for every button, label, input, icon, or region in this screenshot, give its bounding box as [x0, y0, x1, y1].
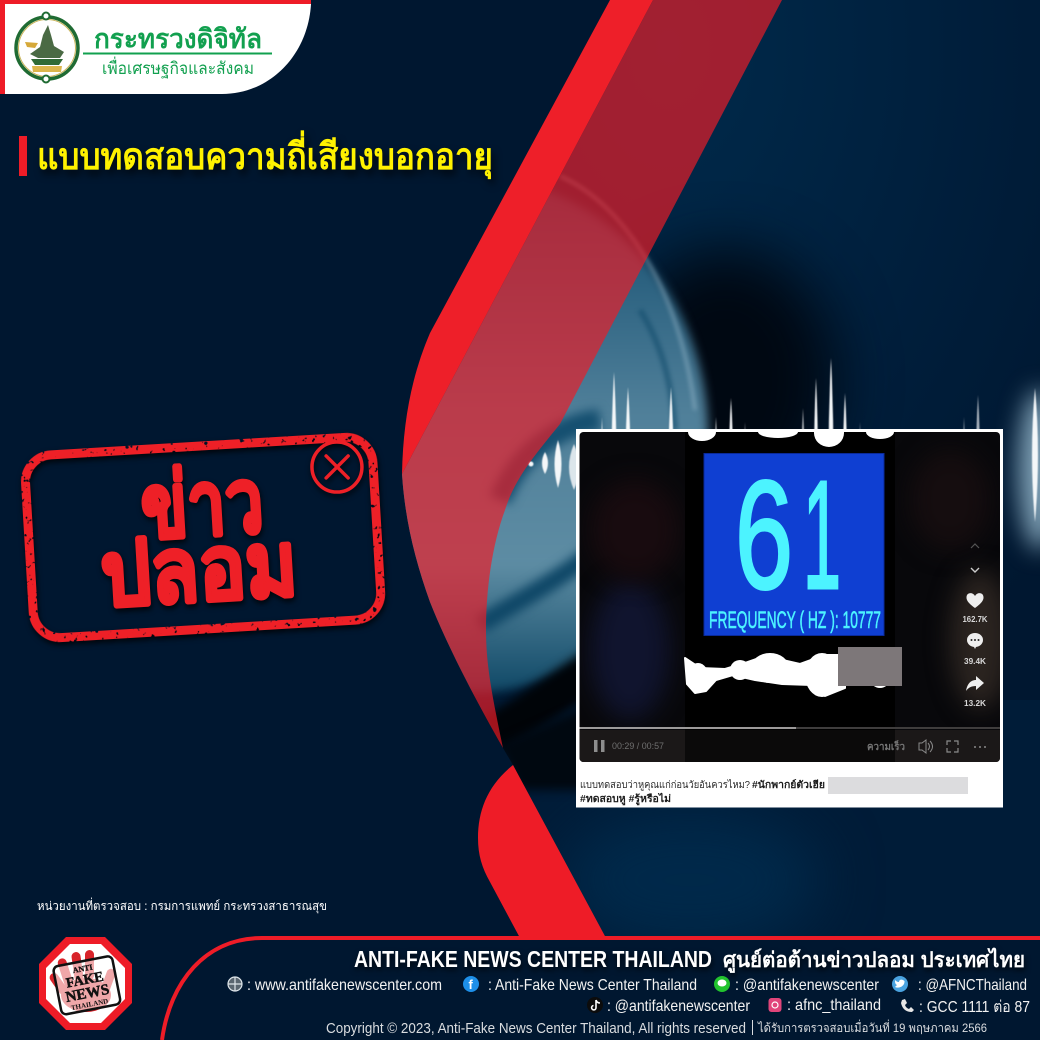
video caption: #นักพากย์ตัวเฮีย — [752, 779, 825, 791]
copyright line: Copyright © 2023, Anti-Fake News Center Thailand, All rights reserved — [326, 1020, 746, 1037]
bright red ribbon edge — [402, 0, 653, 474]
stamp: anti fake news — [53, 956, 121, 1015]
footer panel — [0, 936, 1040, 1040]
side actions: 39.4K — [964, 657, 986, 666]
white waveform blobs top — [688, 432, 894, 447]
stamp: anti fake news: ANTI — [72, 962, 93, 975]
video caption: #ทดสอบหู #รู้หรือไม่ — [580, 792, 671, 806]
contact row 1: : Anti-Fake News Center Thailand — [488, 977, 697, 994]
anti-fake news logo — [39, 937, 132, 1030]
video player — [580, 419, 1010, 762]
ministry logo panel — [0, 0, 311, 94]
lower red ribbon — [478, 765, 606, 938]
video controls bar: ความเร็ว — [867, 739, 905, 753]
contact row 1: : www.antifakenewscenter.com — [247, 977, 442, 994]
contact row 1: : @antifakenewscenter — [735, 977, 880, 994]
side actions: 162.7K — [962, 615, 988, 624]
frequency readout: FREQUENCY ( HZ ): 10777 — [709, 607, 881, 634]
copyright line: ได้รับการตรวจสอบเมื่อวันที่ 19 พฤษภาคม 2566 — [757, 1019, 987, 1035]
stamp: anti fake news: THAILAND — [70, 997, 109, 1012]
footer heading — [354, 946, 1025, 974]
blue frequency panel — [704, 449, 884, 636]
footer heading: ศูนย์ต่อต้านข่าวปลอม ประเทศไทย — [723, 947, 1025, 974]
background photo: ear and sound waves — [402, 0, 1040, 936]
side actions: 13.2K — [964, 699, 986, 708]
white waveform blobs bottom — [685, 653, 890, 697]
video screenshot panel — [576, 419, 1010, 808]
contact row 2: : afnc_thailand — [787, 997, 881, 1014]
stamp: anti fake news: FAKE — [65, 970, 105, 992]
icon: red hand — [48, 950, 117, 1012]
blurred overlay — [838, 647, 902, 686]
age number — [739, 479, 838, 591]
video caption — [580, 777, 968, 806]
video controls bar — [580, 727, 1000, 762]
stamp cross icon — [312, 442, 362, 492]
video caption: แบบทดสอบว่าหูคุณแก่ก่อนวัยอันควรไหม? — [580, 779, 750, 791]
source agency note: หน่วยงานที่ตรวจสอบ : กรมการแพทย์ กระทรวงสาธารณสุข — [37, 897, 327, 914]
stamp text: ข่าว — [138, 451, 266, 559]
video controls bar: 00:29 / 00:57 — [612, 741, 664, 751]
contact row 2 — [587, 997, 1030, 1016]
ministry tagline: เพื่อเศรษฐกิจและสังคม — [102, 56, 254, 79]
fake news stamp — [24, 436, 382, 639]
fake news stamp: ปลอม — [98, 515, 300, 626]
stamp: anti fake news: NEWS — [64, 982, 111, 1006]
side actions — [962, 544, 988, 708]
blue frequency panel: 1 — [803, 449, 841, 621]
title: แบบทดสอบความถี่เสียงบอกอายุ — [37, 130, 493, 180]
contact row 1 — [228, 976, 1027, 994]
translucent red ribbon — [402, 0, 782, 748]
age number: 6 — [735, 449, 793, 621]
contact row 1: f — [468, 977, 474, 992]
ministry name: กระทรวงดิจิทัล — [94, 24, 262, 54]
emblem: ministry crest — [16, 12, 78, 82]
footer heading: ANTI-FAKE NEWS CENTER THAILAND — [354, 946, 712, 972]
sound wave spikes — [528, 358, 1039, 522]
copyright line — [326, 1019, 987, 1037]
contact row 2: : @antifakenewscenter — [607, 998, 751, 1015]
